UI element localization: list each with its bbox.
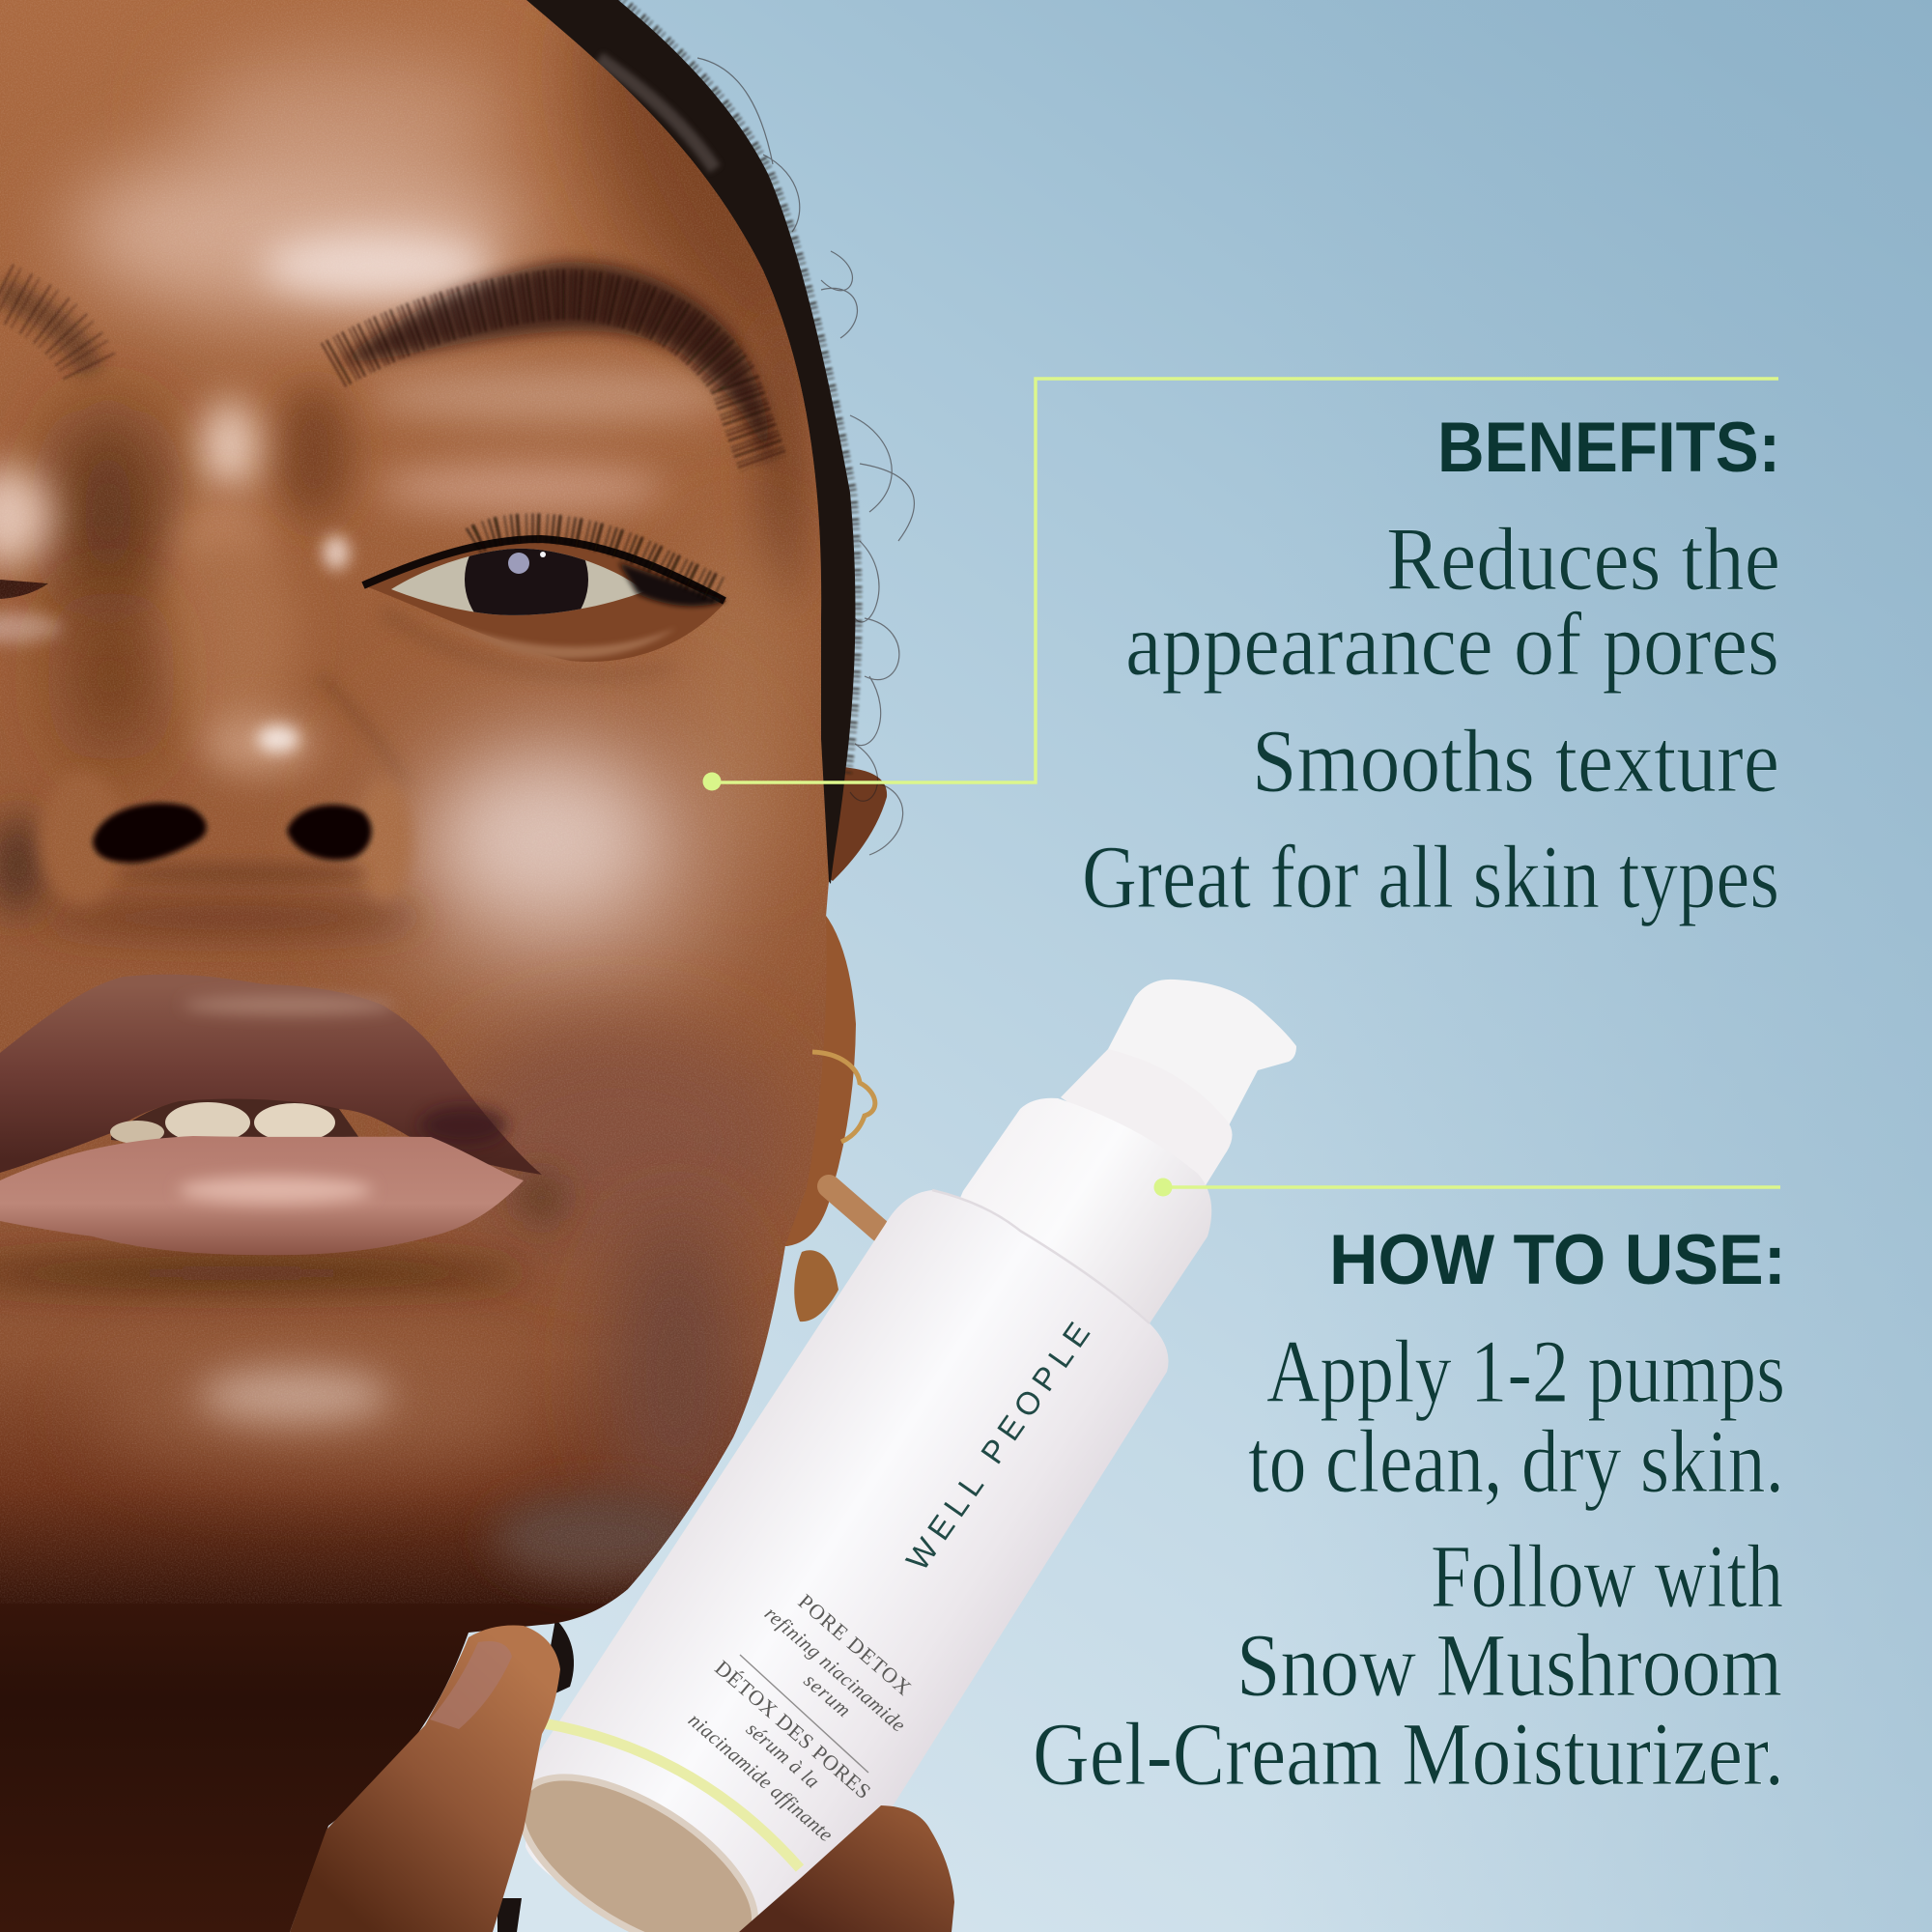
lower cheek and jaw: [444, 1024, 792, 1256]
portrait photo: [0, 0, 914, 1932]
product label: niacinamide affinante: [684, 1708, 838, 1846]
product label: [684, 1589, 916, 1846]
benefits text block: Reduces the: [1386, 510, 1780, 610]
bottle body: [526, 1190, 1169, 1932]
product label: DÉTOX DES PORES: [710, 1656, 875, 1804]
benefits text block: appearance of pores: [1125, 595, 1779, 695]
how to use text block: [1033, 1221, 1786, 1804]
callout: how to use leader line: [1153, 1179, 1780, 1196]
cheek highlight: [681, 531, 797, 860]
benefits text block: [1082, 409, 1780, 927]
heading: how to use: HOW TO USE:: [1329, 1221, 1786, 1299]
left brow: [0, 290, 92, 372]
how to use text block: Follow with: [1431, 1527, 1783, 1627]
under lip shadow: [0, 1260, 531, 1287]
product bottle: [493, 980, 1296, 1932]
nose wings: [40, 773, 125, 904]
pump stem: [1061, 1049, 1233, 1190]
hair: [497, 0, 914, 1932]
pump head: [1108, 980, 1296, 1129]
eye socket shadows: [56, 406, 160, 618]
how to use text block: Apply 1-2 pumps: [1266, 1322, 1785, 1422]
product label: serum: [800, 1668, 856, 1721]
how to use text block: to clean, dry skin.: [1248, 1412, 1784, 1512]
bottle base: [493, 1743, 782, 1932]
product label: sérum à la: [742, 1717, 824, 1793]
earring: charm: [794, 1250, 838, 1321]
forehead highlight: [184, 48, 512, 184]
nose body: [156, 541, 298, 734]
product label: refining niacinamide: [760, 1602, 910, 1736]
nose bridge highlight: [201, 400, 259, 493]
benefits text block: Smooths texture: [1252, 712, 1779, 811]
eyebrow: [333, 262, 770, 464]
chin: [97, 1352, 541, 1468]
brow and lid tone: [367, 369, 734, 423]
icon: upper ear: [816, 763, 887, 881]
brand name: WELL PEOPLE: [899, 1311, 1100, 1577]
mouth interior: [111, 1099, 359, 1146]
nostrils: [93, 803, 372, 863]
eye: [363, 518, 726, 662]
temple shadow: [549, 25, 793, 369]
callout: benefits leader line: [703, 379, 1778, 790]
product label: PORE DETOX: [794, 1589, 916, 1700]
left eye lid: [0, 467, 52, 567]
teeth: [110, 1102, 335, 1144]
thumbnail: [430, 1641, 512, 1729]
under nose shadow: [39, 902, 425, 933]
earring: gold ring: [812, 1052, 875, 1142]
nose crease: [323, 678, 395, 767]
accent stripe: [544, 1723, 800, 1868]
bottle shoulder edge: [932, 1190, 1150, 1323]
icon: lower ear: [763, 913, 856, 1246]
face skin: [0, 0, 882, 1932]
pump collar: [927, 1098, 1211, 1381]
finger: [739, 1805, 954, 1932]
earring: ribbed bar: [829, 1186, 880, 1231]
lips: [0, 975, 542, 1255]
thumb: [290, 1625, 560, 1932]
lower lip: [0, 1136, 524, 1255]
how to use text block: Gel-Cream Moisturizer.: [1033, 1705, 1784, 1804]
benefits text block: Great for all skin types: [1082, 828, 1779, 927]
skin grain: [0, 0, 869, 1604]
how to use text block: Snow Mushroom: [1236, 1616, 1782, 1716]
eye bag line: [388, 613, 630, 678]
heading: benefits: BENEFITS:: [1437, 409, 1780, 487]
hand: [290, 1625, 954, 1932]
